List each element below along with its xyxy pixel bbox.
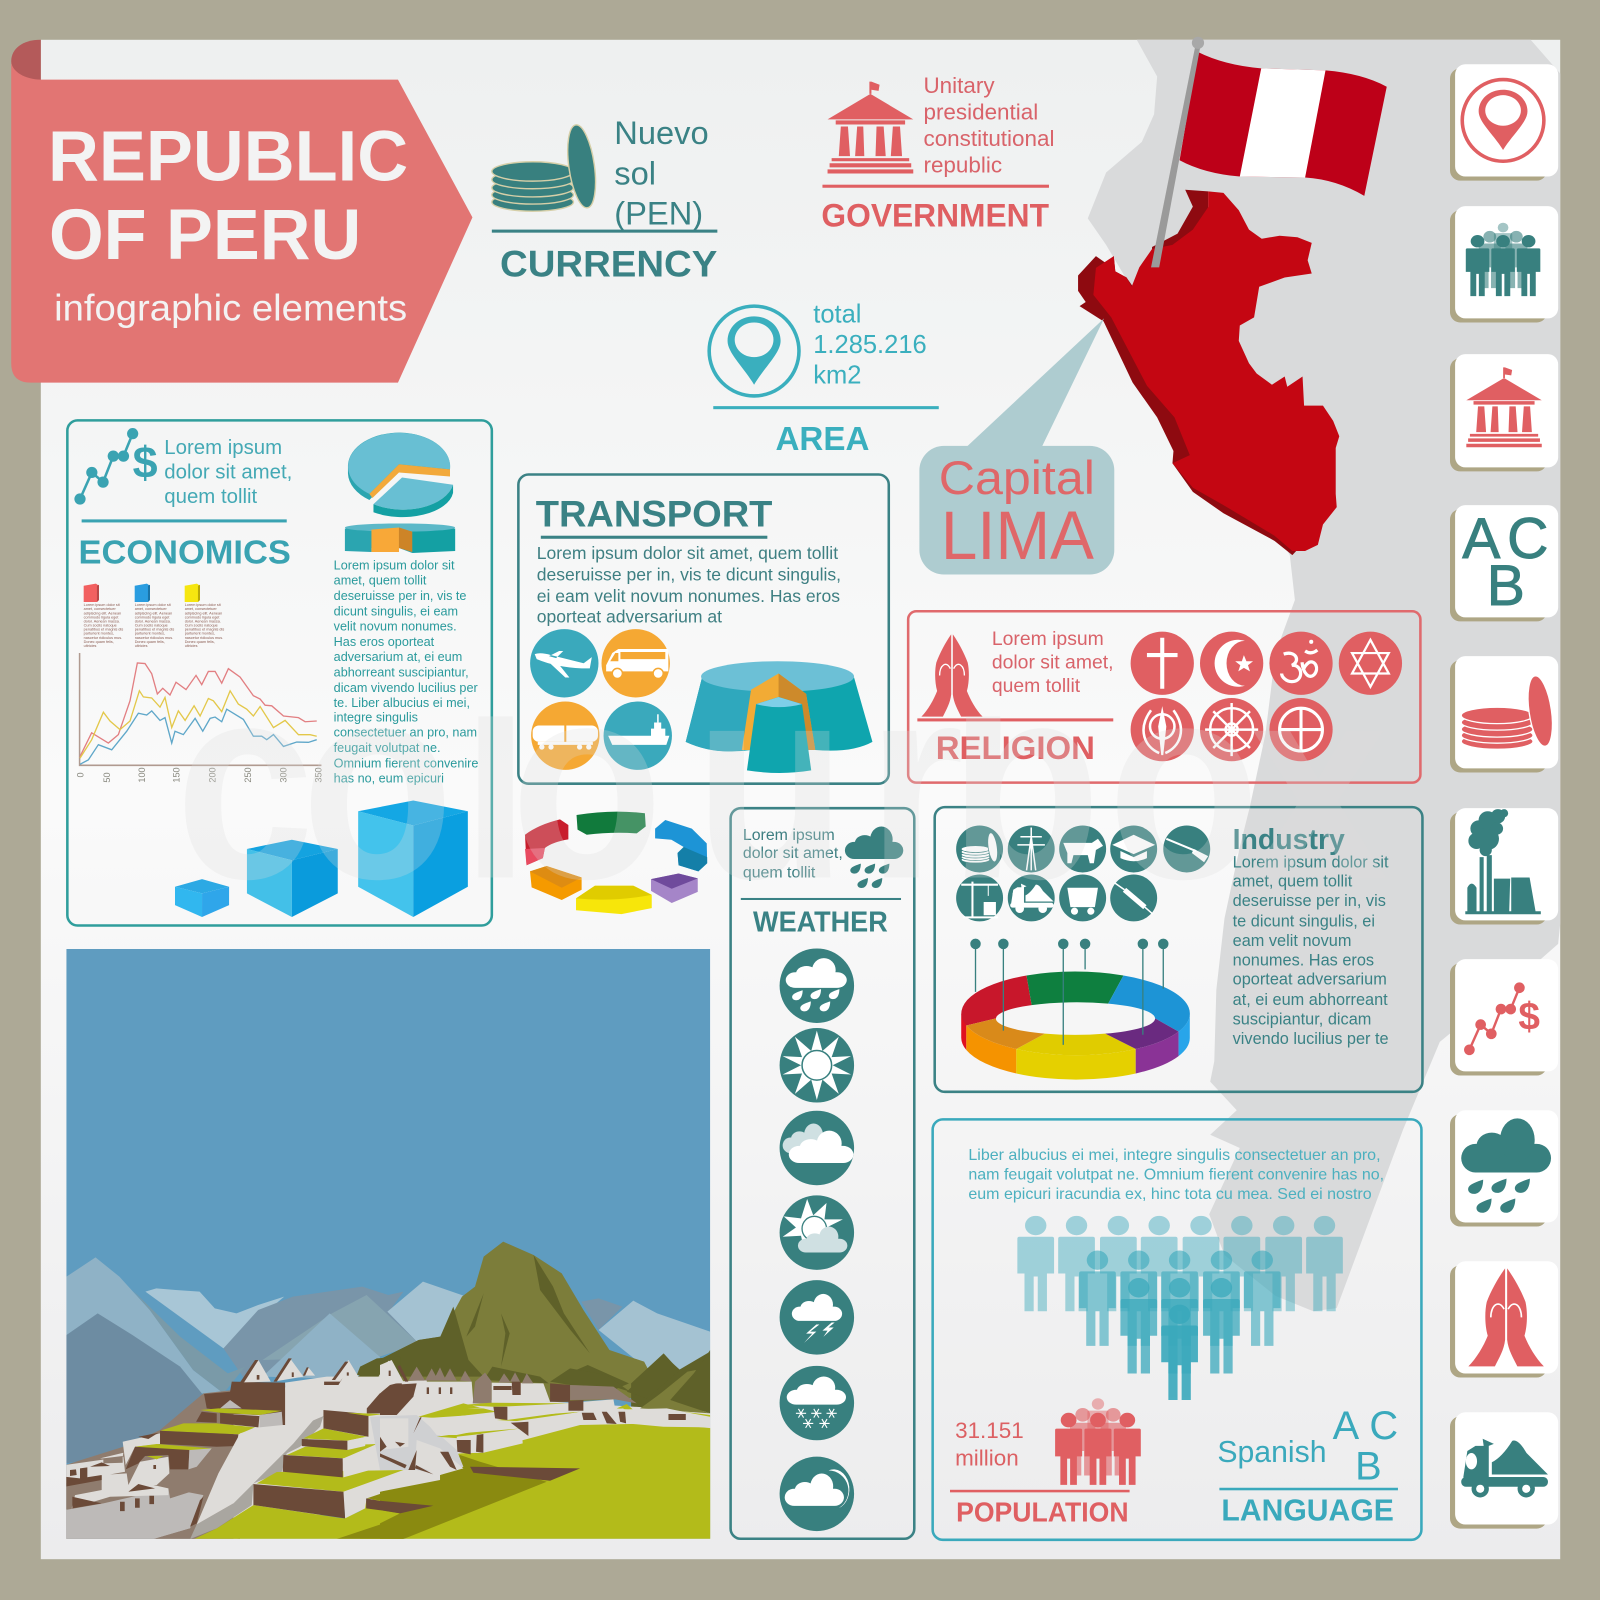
industry text: Lorem ipsum dolor sit [1233, 853, 1389, 871]
illustration: Machu Picchu [65, 949, 713, 1547]
government type [923, 73, 1054, 177]
colored ring segments chart [525, 812, 707, 914]
terraces and buildings right [370, 1350, 710, 1539]
sidebar tile: transport [1450, 1412, 1558, 1529]
currency heading: CURRENCY [500, 244, 717, 285]
icon: chart with dollar [74, 428, 158, 505]
chart legend: ultricies [185, 644, 198, 648]
flag pole [1151, 43, 1201, 267]
icon: location pin [709, 306, 799, 396]
ground base left [65, 1390, 240, 1540]
population text: eum epicuri iracundia ex, hinc tota cu mea. Sed ei nostro [968, 1185, 1372, 1203]
economics body text: dicam vivendo lucilius per [334, 681, 478, 695]
currency block [492, 114, 717, 285]
icon: sunny [780, 1028, 854, 1103]
chart legend [84, 584, 224, 648]
icon: ship [604, 702, 672, 770]
economics body text: deseruisse per in, vis te [334, 589, 466, 603]
chart axis labels: 200 [207, 767, 217, 783]
chart legend: ultricies [84, 644, 97, 648]
sidebar tile: government [1450, 354, 1558, 471]
chart legend: adipiscing elit. Aenean [84, 611, 121, 615]
banner body [11, 61, 472, 383]
icon: moon and cloud [780, 1457, 854, 1531]
icon: dump truck [1008, 874, 1055, 921]
icon: rainy [780, 948, 854, 1023]
icon: airplane [530, 629, 598, 697]
sidebar tile: industry [1450, 808, 1558, 924]
economics body text: Lorem ipsum dolor sit [334, 558, 455, 572]
icon: sun and cloud [780, 1195, 854, 1270]
icon: government building [828, 82, 913, 173]
chart axis labels: 0 [76, 772, 86, 778]
government type: presidential [923, 99, 1038, 124]
sidebar tile: population [1450, 206, 1558, 322]
sidebar tile: language: C [1507, 507, 1548, 571]
chart legend: commodo ligula eget [135, 615, 170, 619]
economics body text: Has eros oporteat [334, 635, 435, 649]
icon: snow [780, 1366, 854, 1440]
currency name: (PEN) [614, 194, 703, 231]
chart axis labels: 250 [243, 767, 253, 783]
economics body text: abhorreant suscipiantur, [334, 666, 469, 680]
line chart [80, 653, 321, 765]
industry text: suscipiantur, dicam [1233, 1010, 1371, 1028]
icon: alphabet: C [1369, 1404, 1398, 1448]
chart legend: dolor. Aenean massa. [185, 619, 221, 623]
industry text: at, ei eum abhorreant [1233, 991, 1388, 1009]
sidebar tile: weather [1450, 1110, 1558, 1227]
population value: 31.151 [955, 1418, 1024, 1443]
title text: infographic elements [54, 287, 407, 328]
icon: crescent and star [1200, 632, 1263, 695]
sidebar tile: language: A [1462, 507, 1500, 571]
banner curl [11, 40, 41, 83]
3D ring section chart [345, 523, 455, 553]
industry text: oporteat adversarium [1233, 971, 1387, 989]
map face [1093, 191, 1339, 551]
sidebar tile: religion [1450, 1261, 1558, 1378]
panel: industry [935, 807, 1422, 1092]
population value [955, 1418, 1024, 1470]
language heading: LANGUAGE [1221, 1493, 1394, 1527]
economics body text: feugait volutpat ne. [334, 741, 441, 755]
panel: weather [731, 808, 914, 1539]
chart legend: parturient montes, [135, 632, 165, 636]
government type: constitutional [923, 126, 1054, 151]
ground base right [426, 1400, 710, 1454]
industry text: nonumes. Has eros [1233, 951, 1374, 969]
economics intro text: Lorem ipsum [164, 437, 282, 459]
chart legend: parturient montes, [84, 632, 114, 636]
transport heading: TRANSPORT [536, 494, 773, 535]
icon: syringe [1110, 874, 1157, 921]
green segment [577, 812, 646, 835]
map of Peru [1078, 190, 1339, 555]
capital callout [919, 318, 1114, 574]
chart legend: commodo ligula eget [185, 615, 220, 619]
icon: power pylon [1008, 826, 1055, 872]
chart legend: commodo ligula eget [84, 615, 119, 619]
chart legend: nascetur ridiculus mus. [84, 636, 122, 640]
transport text: oporteat adversarium at [537, 606, 722, 626]
chart legend: amet, consectetuer [185, 607, 217, 611]
chart legend: Donec quam felis, [135, 640, 165, 644]
icon: crane [956, 874, 1003, 921]
blue segment [655, 820, 707, 871]
icon: alphabet: A [1333, 1404, 1360, 1448]
population text [968, 1146, 1384, 1203]
sidebar tile: language: B [1487, 554, 1525, 618]
icon: graduation cap [1110, 826, 1157, 872]
chart legend: Lorem ipsum dolor sit [185, 603, 222, 607]
3D pie chart [348, 433, 453, 517]
chart legend: Cum sociis natoque [84, 624, 117, 628]
area value: km2 [813, 362, 861, 390]
icon: alphabet: B [1355, 1445, 1382, 1489]
donut top segments [961, 976, 1032, 1026]
transport text: Lorem ipsum dolor sit amet, quem tollit [537, 543, 838, 563]
panel: economics [67, 420, 492, 926]
industry text: amet, quem tollit [1233, 873, 1353, 891]
government type: republic [923, 152, 1002, 177]
area value [813, 300, 927, 390]
map extrusion [1078, 190, 1301, 555]
religion text: Lorem ipsum [992, 628, 1104, 650]
government block [821, 73, 1054, 234]
icon: coins [956, 826, 1003, 872]
weather text: quem tollit [743, 865, 816, 882]
icon: star of David [1339, 632, 1402, 695]
chart axis labels: 50 [102, 772, 112, 783]
watermark: colourbox [175, 626, 1389, 936]
chart legend: Lorem ipsum dolor sit [84, 603, 121, 607]
panel: transport [518, 474, 889, 784]
chart legend: dolor. Aenean massa. [84, 619, 120, 623]
chart legend: amet, consectetuer [84, 607, 116, 611]
capital label: Capital [939, 452, 1095, 504]
chart legend: ultricies [135, 644, 148, 648]
icon: rain cloud [845, 827, 903, 888]
chart axis labels: 350 [313, 767, 323, 783]
grass field [360, 1423, 713, 1547]
flag of Peru [1151, 37, 1387, 267]
icon: khanda [1131, 698, 1194, 761]
chart legend: penatibus et magnis dis [84, 628, 123, 632]
donut side [961, 1013, 966, 1050]
economics body text [334, 558, 478, 786]
currency name: Nuevo [614, 114, 709, 151]
chart legend: amet, consectetuer [135, 607, 167, 611]
chart legend: parturient montes, [185, 632, 215, 636]
weather text [743, 827, 843, 882]
icon: praying hands [921, 634, 983, 717]
economics body text: consectetuer an pro, nam [334, 726, 477, 740]
area heading: AREA [776, 421, 869, 458]
title text: REPUBLIC [48, 117, 408, 197]
industry heading: Industry [1233, 824, 1345, 856]
orange segment [530, 866, 582, 900]
industry text [1233, 853, 1389, 1048]
population text: Liber albucius ei mei, integre singulis consectetuer an pro, [968, 1146, 1381, 1164]
chart legend: penatibus et magnis dis [185, 628, 224, 632]
language value: Spanish [1217, 1435, 1327, 1469]
icon: circled cross [1269, 698, 1333, 761]
area value: 1.285.216 [813, 331, 927, 359]
economics body text: has no, eum epicuri [334, 772, 444, 786]
religion text: dolor sit amet, [992, 651, 1114, 673]
transport text: deseruisse per in, vis te dicunt singulis, [537, 565, 841, 585]
flag cloth [1180, 52, 1387, 196]
title text [48, 117, 408, 328]
purple segment [651, 873, 698, 903]
chart legend: adipiscing elit. Aenean [185, 611, 222, 615]
chart legend: Lorem ipsum dolor sit [135, 603, 172, 607]
weather heading: WEATHER [753, 907, 888, 939]
area value: total [813, 300, 861, 328]
religion text: quem tollit [992, 675, 1081, 697]
chart legend: Donec quam felis, [185, 640, 215, 644]
currency name [614, 114, 709, 231]
sidebar tile: language [1450, 505, 1558, 621]
icon: bus [602, 629, 670, 697]
icon: cow [1059, 826, 1106, 872]
panel: population and language [933, 1119, 1421, 1540]
economics intro text: quem tollit [164, 486, 258, 508]
economics body text: te. Liber albucius ei mei, [334, 696, 470, 710]
chart legend: penatibus et magnis dis [135, 628, 174, 632]
area block [709, 300, 939, 458]
capital callout: LIMA [941, 498, 1094, 574]
chart axis labels: 300 [279, 767, 289, 783]
mountains [66, 1242, 710, 1463]
icon: crowd [1055, 1398, 1141, 1485]
chart legend: nascetur ridiculus mus. [185, 636, 223, 640]
icon: cloudy [780, 1111, 854, 1185]
yellow segment [576, 886, 652, 914]
transport text [537, 543, 841, 626]
title text: OF PERU [49, 195, 361, 275]
industry text: vivendo lucilius per te [1233, 1030, 1389, 1048]
economics intro text [164, 437, 292, 508]
weather text: Lorem ipsum [743, 827, 835, 844]
icon: cross [1131, 632, 1194, 695]
religion text [992, 628, 1114, 697]
chart legend: dolor. Aenean massa. [135, 619, 171, 623]
chart axis labels: 100 [137, 767, 147, 783]
population heading: POPULATION [956, 1496, 1129, 1527]
economics body text: adversarium at, ei eum [334, 650, 462, 664]
economics body text: velit novum nonumes. [334, 620, 457, 634]
economics body text: amet, quem tollit [334, 574, 427, 588]
economics body text: integre singulis [334, 710, 418, 724]
red segment [525, 819, 568, 865]
government heading: GOVERNMENT [821, 197, 1049, 234]
chart legend: adipiscing elit. Aenean [135, 611, 172, 615]
population text: nam feugait volutpat ne. Omnium fierent convenire has no, [968, 1166, 1384, 1184]
chart legend: Donec quam felis, [84, 640, 114, 644]
chart axis labels [76, 767, 323, 783]
industry text: te dicunt singulis, ei [1233, 913, 1375, 931]
icon: alphabet [1333, 1404, 1398, 1489]
icon: chart with dollar: $ [133, 437, 158, 488]
transport text: ei eam velit novum nonumes. Has eros [537, 586, 840, 606]
government type: Unitary [923, 73, 995, 98]
title banner [11, 40, 472, 383]
economics body text: dicunt singulis, ei eam [334, 604, 458, 618]
icon: mine cart [1059, 874, 1106, 921]
3D donut chart [961, 939, 1190, 1080]
panel: religion [908, 611, 1420, 783]
economics heading: ECONOMICS [79, 534, 291, 571]
weather text: dolor sit amet, [743, 845, 843, 862]
chart legend: nascetur ridiculus mus. [135, 636, 173, 640]
sidebar tile: area [1450, 64, 1558, 181]
chart legend: Cum sociis natoque [185, 624, 218, 628]
chart pins [971, 939, 1168, 1045]
economics intro text: dolor sit amet, [164, 462, 292, 484]
currency name: sol [614, 155, 656, 192]
chart axis labels: 150 [172, 767, 182, 783]
religion heading: RELIGION [936, 729, 1095, 766]
sidebar tile: currency [1450, 656, 1558, 772]
sidebar tile: economics [1450, 959, 1558, 1076]
chart legend: Cum sociis natoque [135, 624, 168, 628]
icon: dharma wheel [1200, 698, 1263, 761]
icon: rifle [1163, 826, 1210, 872]
icon: thunderstorm [780, 1280, 854, 1355]
3D pie chart [686, 661, 872, 773]
icon: tank wagon [531, 702, 599, 770]
icon: om [1269, 632, 1333, 695]
background map of South America [1088, 40, 1560, 1311]
sidebar tile: economics: $ [1518, 996, 1540, 1039]
industry text: eam velit novum [1233, 932, 1351, 950]
industry text: deseruisse per in, vis [1233, 892, 1386, 910]
people pictogram [1017, 1216, 1343, 1400]
terraces left [65, 1357, 427, 1540]
population value: million [955, 1445, 1019, 1470]
economics body text: Omnium fierent convenire [334, 756, 478, 770]
icon: coins [492, 123, 600, 211]
3D cube bars [175, 801, 468, 917]
